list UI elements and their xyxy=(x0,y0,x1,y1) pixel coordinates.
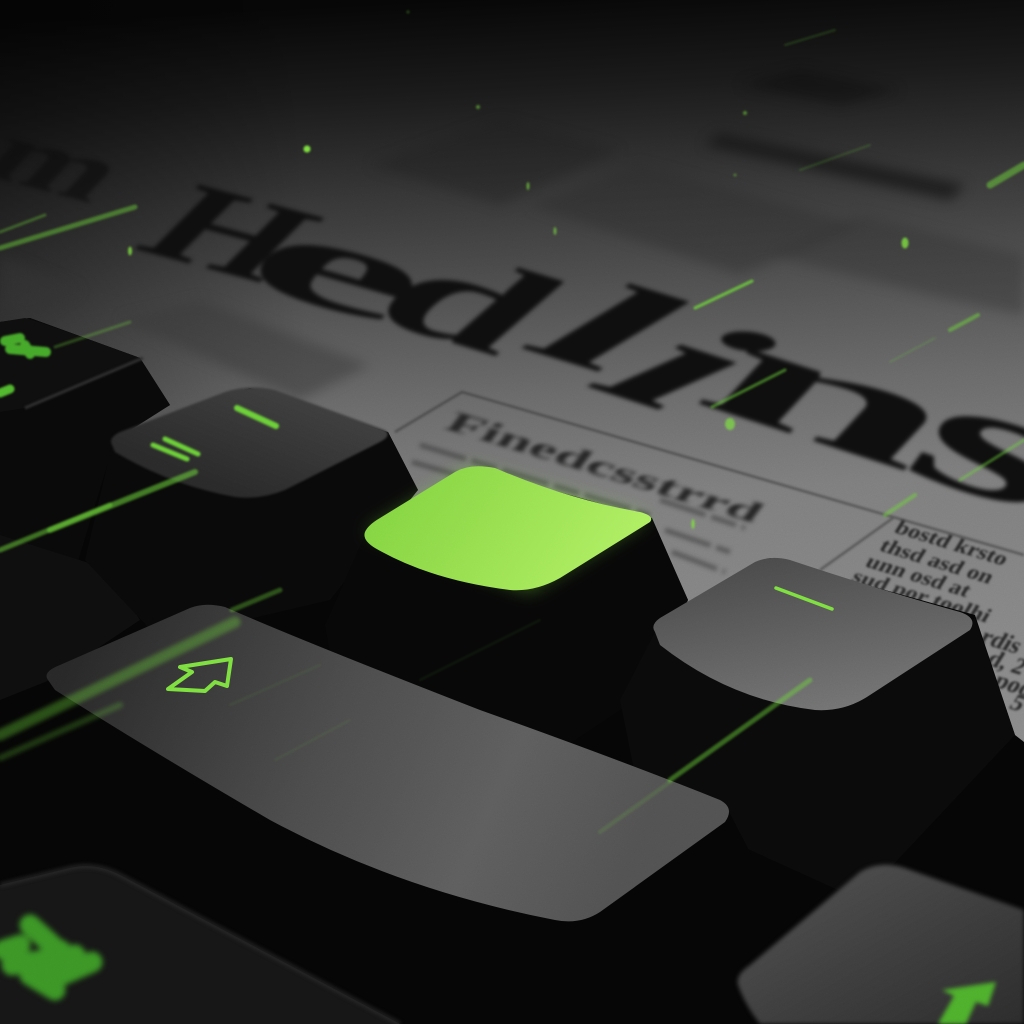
legend: arrow xyxy=(168,659,231,691)
headline text: H xyxy=(110,161,349,305)
article text right: unn osd at xyxy=(862,550,976,601)
headline text: d xyxy=(337,224,603,379)
glow xyxy=(365,467,650,592)
headline text: n xyxy=(664,294,1009,498)
article text right: sud por toolhi xyxy=(848,565,996,627)
key: bottom-right xyxy=(738,865,1024,1024)
key: bottom-left xyxy=(0,866,400,1024)
key top xyxy=(653,558,972,710)
legend: blurred glyph xyxy=(4,925,92,990)
key top surface xyxy=(0,318,140,412)
floating green particles xyxy=(128,10,908,529)
key: equals and minus xyxy=(85,387,418,640)
key top xyxy=(46,605,729,921)
legend: minus xyxy=(776,588,832,609)
article text right: bostd krsto xyxy=(891,516,1013,570)
top-left key glyphs xyxy=(0,338,46,393)
keyboard base shadow xyxy=(0,318,1024,1024)
key: left middle xyxy=(0,535,140,700)
key top xyxy=(111,387,388,498)
key body xyxy=(325,520,688,770)
key: glowing green xyxy=(325,466,688,770)
headline text xyxy=(0,106,1024,546)
key top xyxy=(364,466,651,590)
headline text: l xyxy=(481,263,742,393)
newspaper rules and lower articles xyxy=(395,392,1024,723)
rule lines xyxy=(395,392,1024,570)
key: right minus xyxy=(620,558,1015,900)
headline text: e xyxy=(212,186,474,349)
legend: up arrow xyxy=(938,982,996,1024)
newspaper upper text blocks xyxy=(0,70,1024,400)
article text right xyxy=(848,516,1024,723)
key body xyxy=(85,432,418,640)
key body xyxy=(620,618,1015,900)
article lines left xyxy=(412,445,745,572)
headline text: i xyxy=(536,303,844,431)
article text right: thsd asd on xyxy=(876,534,999,588)
key body xyxy=(0,680,780,1024)
green light streaks xyxy=(0,30,1024,832)
legend: equals xyxy=(153,439,198,459)
legend: minus xyxy=(237,408,276,426)
subheading: Finedcsstrrd xyxy=(439,405,771,529)
key: top-left xyxy=(0,318,170,640)
key: long shift xyxy=(0,605,780,1024)
